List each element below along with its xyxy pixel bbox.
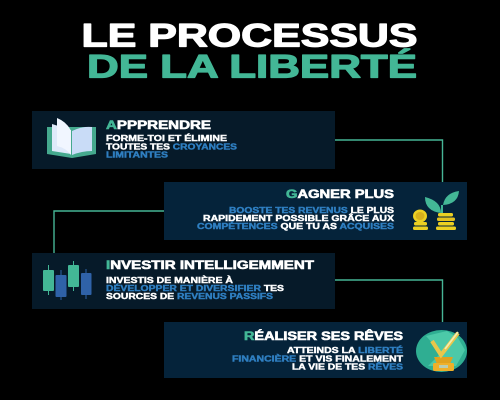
heading: réaliser ses rêves: RÉALISER SES RÊVES [244, 330, 403, 343]
title: LE PROCESSUS [82, 18, 418, 54]
icon: trophy with check mark [416, 330, 467, 372]
panel: investir intelligemment [32, 253, 335, 309]
heading: apprendre: APPPRENDRE [106, 120, 211, 132]
title: DE LA LIBERTÉ [87, 48, 417, 84]
body: apprendre: FORME-TOI ET ÉLIMINE [106, 133, 227, 143]
body: gagner plus: RAPIDEMENT POSSIBLE GRÂCE AUX [203, 212, 394, 223]
body: investir: DÉVELOPPER ET DIVERSIFIER TES [106, 283, 284, 293]
icon: candlestick chart [43, 261, 92, 300]
body: apprendre: TOUTES TES CROYANCES [106, 142, 237, 152]
body: réaliser: LA VIE DE TES RÊVES [292, 360, 403, 372]
title [82, 18, 418, 84]
panel: réaliser ses rêves [164, 322, 467, 378]
body: réaliser: ATTEINDS LA LIBERTÉ [287, 345, 403, 355]
body: investir: SOURCES DE REVENUS PASSIFS [106, 291, 273, 301]
panel: apprendre [32, 111, 335, 169]
body: gagner plus [197, 205, 394, 231]
body: investir: INVESTIS DE MANIÈRE À [106, 275, 233, 285]
connector arrows [54, 140, 442, 322]
panel: gagner plus [164, 182, 467, 240]
body: apprendre: LIMITANTES [106, 150, 168, 160]
body: réaliser [232, 345, 404, 372]
icon: coins and plant [413, 191, 459, 230]
body: investir [106, 275, 284, 301]
body: gagner plus: BOOSTE TES REVENUS LE PLUS [229, 205, 394, 215]
body: apprendre [106, 133, 237, 160]
icon: open book [47, 118, 96, 158]
body: gagner plus: COMPÉTENCES QUE TU AS ACQUISES [197, 221, 394, 231]
heading: investir intelligemment: INVESTIR INTELLIGEMMENT [106, 260, 314, 272]
heading: gagner plus: GAGNER PLUS [286, 189, 394, 201]
body: réaliser: FINANCIÈRE ET VIS FINALEMENT [232, 354, 404, 364]
